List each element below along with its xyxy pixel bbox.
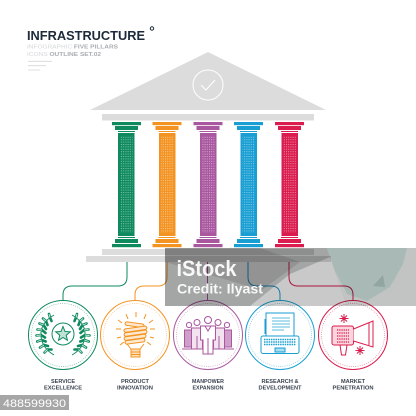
label: product innovation (117, 379, 153, 391)
label: manpower expansion: MANPOWER (192, 379, 224, 385)
icon: document and laptop (261, 313, 299, 354)
label: research and development: RESEARCH & (262, 379, 299, 385)
label: product innovation: PRODUCT (121, 379, 150, 385)
badge: service excellence (28, 300, 98, 370)
badge: product innovation (100, 300, 170, 370)
watermark credit: Credit: Ilyast (177, 282, 264, 296)
label: service excellence (44, 379, 82, 391)
pillar: red (275, 122, 304, 247)
temple base (86, 249, 331, 262)
connector: green (63, 262, 127, 300)
label: research and development (258, 379, 302, 391)
icon: light bulb (116, 312, 155, 357)
connector: orange (135, 262, 167, 300)
connector: purple (206, 262, 208, 300)
icon: check badge (193, 70, 223, 100)
label: market penetration (332, 379, 374, 391)
label: market penetration: PENETRATION (332, 385, 374, 391)
badge: manpower expansion (174, 300, 242, 370)
pillar: orange (152, 122, 182, 247)
badge: market penetration (318, 300, 388, 370)
watermark image id: 488599930 (3, 398, 66, 410)
subtitle: INFOGRAPHIC FIVE PILLARS (27, 44, 118, 50)
connector: blue (248, 262, 280, 300)
watermark brand: iStock (176, 256, 237, 281)
pillar: purple (194, 122, 222, 247)
label: manpower expansion: EXPANSION (192, 385, 224, 391)
watermark image id (0, 395, 69, 410)
connector: red (289, 262, 353, 300)
label: service excellence: SERVICE (51, 379, 75, 385)
label: product innovation: INNOVATION (117, 385, 153, 391)
subtitle: ICONS OUTLINE SET.02 (27, 52, 101, 58)
icon: group of people (182, 316, 234, 354)
title: INFRASTRUCTURE (27, 29, 145, 43)
entablature (102, 114, 314, 120)
watermark panel (165, 248, 416, 306)
label: market penetration: MARKET (341, 379, 366, 385)
pillar: blue (234, 122, 263, 247)
label: manpower expansion (192, 379, 224, 391)
badge: research and development (246, 300, 314, 370)
subtitle (27, 44, 118, 58)
temple roof (90, 52, 326, 110)
label: service excellence: EXCELLENCE (44, 385, 82, 391)
icon: megaphone (332, 314, 373, 355)
label: research and development: DEVELOPMENT (258, 385, 302, 391)
icon: star and laurel (36, 314, 90, 355)
pillar: green (112, 122, 141, 247)
